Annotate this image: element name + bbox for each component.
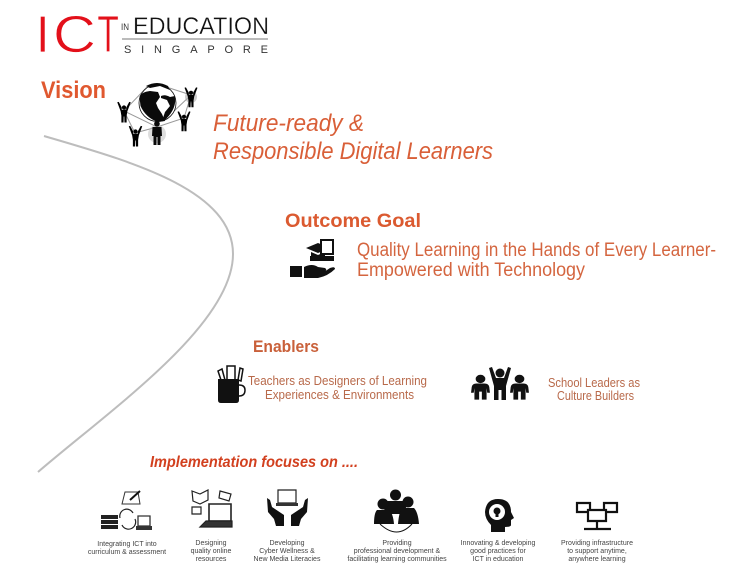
- icon: three people in circle: [374, 490, 419, 532]
- caption: Innovating & developing: [461, 540, 535, 547]
- icon: mug with pencils: [218, 366, 245, 403]
- caption: curriculum & assessment: [88, 549, 166, 556]
- caption: facilitating learning communities: [347, 556, 447, 563]
- teachers line one: Teachers as Designers of Learning: [248, 374, 427, 388]
- logo small letter: in: IN: [121, 22, 129, 32]
- logo word: ICT: C: [53, 6, 96, 64]
- focus 6: infrastructure: [561, 503, 633, 563]
- icon: head with lightbulb: [485, 499, 514, 532]
- caption: Cyber Wellness &: [259, 548, 315, 555]
- caption: Developing: [269, 540, 305, 547]
- focus 3: cyber wellness: [254, 490, 321, 563]
- vision line two: Responsible Digital Learners: [213, 138, 493, 165]
- caption: to support anytime,: [567, 548, 627, 555]
- caption: Providing infrastructure: [561, 540, 633, 547]
- journey curve: [38, 136, 233, 472]
- icon: hand holding learning: [290, 240, 335, 278]
- icon: books and laptop: [192, 490, 232, 527]
- heading: implementation focuses on: Implementation focuses on ....: [150, 454, 358, 471]
- logo word: ICT: I: [36, 6, 50, 64]
- vision statement: [213, 110, 493, 165]
- teachers line two: Experiences & Environments: [265, 388, 414, 402]
- leaders line two: Culture Builders: [557, 389, 634, 403]
- logo word: education: EDUCATION: [133, 13, 269, 40]
- outcome line one: Quality Learning in the Hands of Every Learner-: [357, 240, 716, 261]
- icon: group of leaders: [471, 367, 529, 400]
- caption: Designing: [195, 540, 227, 547]
- caption: resources: [196, 556, 227, 563]
- enabler: school leaders: [548, 376, 640, 403]
- enabler: teachers: [248, 374, 427, 402]
- caption: professional development &: [354, 548, 441, 555]
- heading: outcome goal: Outcome Goal: [285, 210, 421, 232]
- focus 2: designing resources: [191, 490, 232, 563]
- outcome line two: Empowered with Technology: [357, 260, 585, 281]
- caption: ICT in education: [473, 556, 524, 563]
- outcome statement: [357, 240, 716, 281]
- icon: globe with connected people: [117, 83, 197, 146]
- focus 1: integrating ICT: [88, 491, 166, 556]
- logo: ICT in Education Singapore: [36, 6, 269, 64]
- leaders line one: School Leaders as: [548, 376, 640, 390]
- logo word: ICT: T: [97, 6, 119, 64]
- caption: good practices for: [470, 548, 526, 555]
- icon: hands holding laptop: [267, 490, 308, 526]
- caption: New Media Literacies: [254, 556, 321, 563]
- icon: books, cycle, laptop: [101, 491, 152, 530]
- caption: Providing: [382, 540, 412, 547]
- focus 4: professional development: [347, 490, 447, 563]
- vision line one: Future-ready &: [213, 110, 364, 137]
- focus 5: innovating: [461, 499, 535, 563]
- heading: vision: Vision: [41, 77, 106, 104]
- caption: anywhere learning: [568, 556, 626, 563]
- heading: enablers: Enablers: [253, 338, 319, 356]
- icon: networked computers: [577, 503, 617, 529]
- caption: quality online: [191, 548, 232, 555]
- logo word: singapore: SINGAPORE: [124, 44, 268, 56]
- caption: Integrating ICT into: [97, 541, 157, 548]
